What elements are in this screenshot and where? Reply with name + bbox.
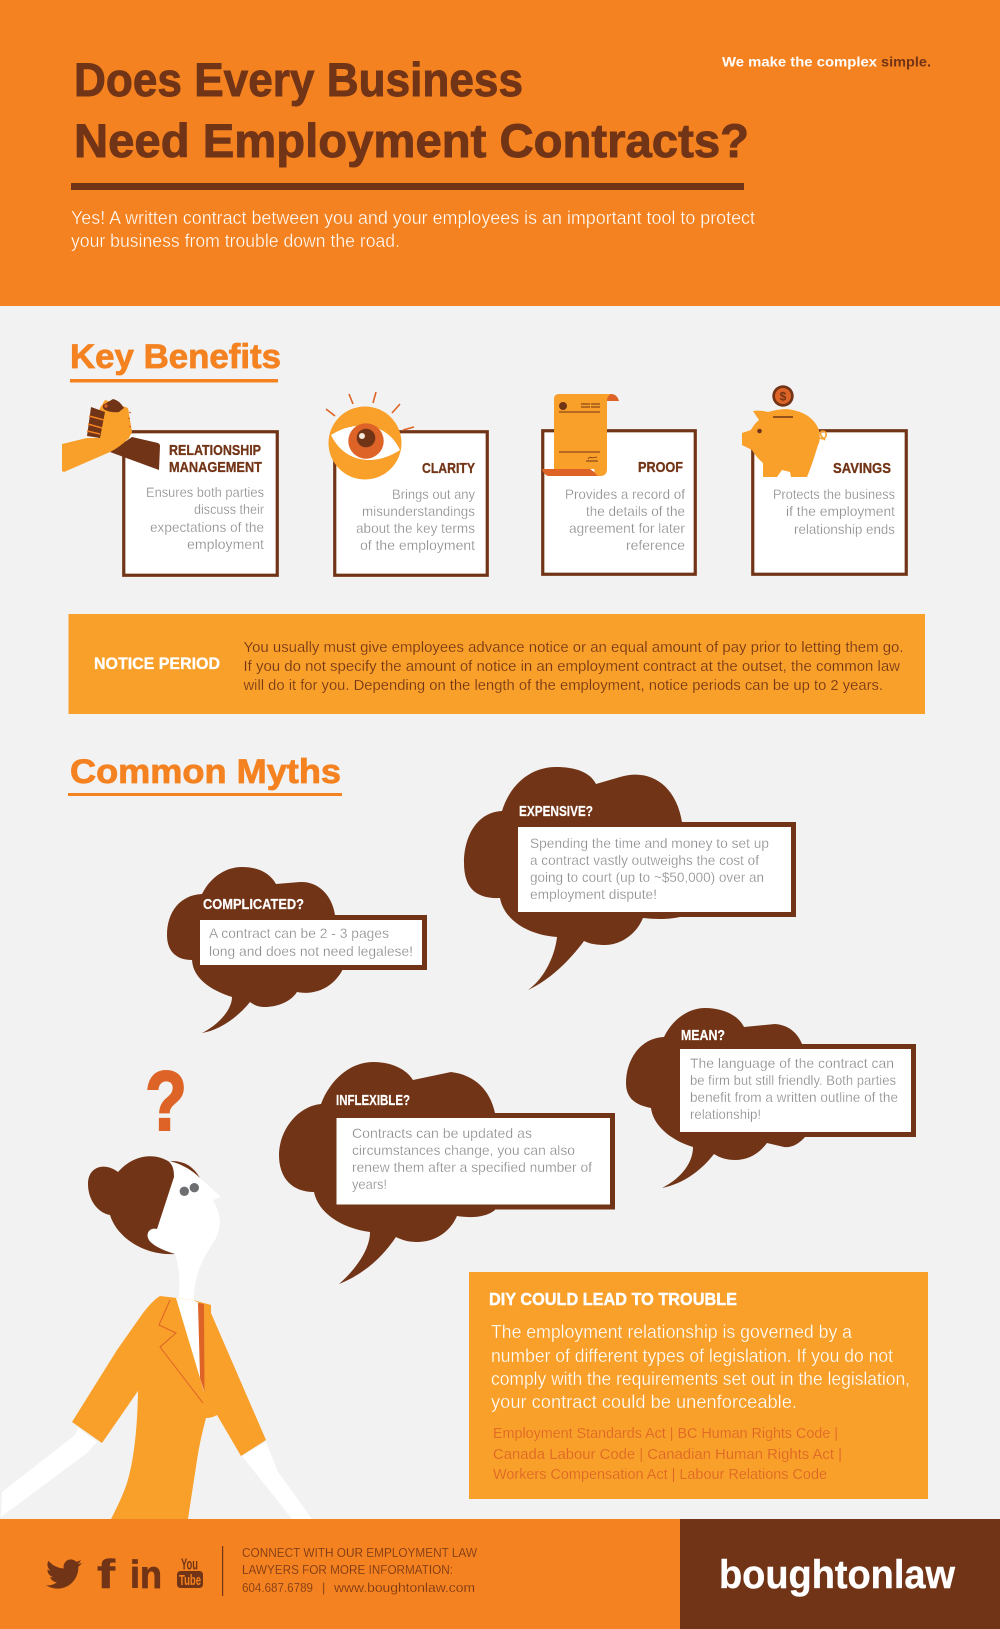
myth text xyxy=(690,1055,898,1122)
myth title: COMPLICATED? xyxy=(203,897,304,913)
card title xyxy=(169,443,262,476)
card text: of the employment xyxy=(360,537,475,553)
card text: employment xyxy=(187,536,264,552)
myth text: The language of the contract can xyxy=(690,1055,894,1071)
card text: Brings out any xyxy=(392,486,475,502)
logo panel xyxy=(680,1519,1000,1629)
heading: common myths: Common Myths xyxy=(70,753,341,791)
tie xyxy=(198,1303,204,1392)
notice heading: NOTICE PERIOD xyxy=(94,654,220,673)
intro text: Yes! A written contract between you and your employees is an important tool to protect xyxy=(71,207,755,228)
contact text: www.boughtonlaw.com xyxy=(333,1580,475,1595)
myth title: MEAN? xyxy=(681,1028,725,1044)
illustration: woman looking up xyxy=(1,1156,312,1519)
myth text: long and does not need legalese! xyxy=(209,943,413,959)
card text: agreement for later xyxy=(569,520,685,536)
myth title: INFLEXIBLE? xyxy=(336,1093,410,1109)
myth text: Spending the time and money to set up xyxy=(530,835,769,851)
card text: expectations of the xyxy=(150,519,264,535)
icon: youtube: Tube xyxy=(179,1572,201,1589)
myth text: Contracts can be updated as xyxy=(352,1125,532,1141)
card text: Provides a record of xyxy=(565,486,685,502)
tagline xyxy=(722,54,931,70)
DIY text: comply with the requirements set out in the legislation, xyxy=(491,1368,910,1389)
contact text: LAWYERS FOR MORE INFORMATION: xyxy=(242,1562,453,1577)
icon: piggy bank: $ xyxy=(780,390,787,404)
DIY text xyxy=(491,1321,910,1412)
card text: reference xyxy=(626,537,685,553)
title: Does Every Business xyxy=(74,53,523,106)
tagline: simple. xyxy=(881,54,931,70)
speech bubble: complicated xyxy=(167,867,424,1033)
speech bubble: inflexible xyxy=(279,1062,612,1284)
myth text xyxy=(352,1125,592,1192)
card title: PROOF xyxy=(638,460,683,476)
notice text: will do it for you. Depending on the length of the employment, notice periods can be up to 2 years. xyxy=(243,677,883,694)
icon: piggy bank xyxy=(742,385,826,477)
myth text: relationship! xyxy=(690,1106,761,1122)
icon: handshake xyxy=(62,399,160,472)
DIY text: your contract could be unenforceable. xyxy=(491,1391,797,1412)
title rule xyxy=(71,183,744,190)
card text: discuss their xyxy=(194,501,264,517)
card text: Ensures both parties xyxy=(146,484,264,500)
intro text xyxy=(71,207,755,251)
lapel xyxy=(159,1300,203,1403)
card title: SAVINGS xyxy=(833,461,891,477)
contact text: 604.687.6789 xyxy=(242,1580,313,1595)
myth text: employment dispute! xyxy=(530,886,657,902)
eyes xyxy=(180,1183,199,1196)
title xyxy=(74,53,749,167)
card text: the details of the xyxy=(586,503,685,519)
card text xyxy=(773,486,895,537)
myth text xyxy=(209,925,413,959)
title: Need Employment Contracts? xyxy=(74,114,749,167)
notice text: You usually must give employees advance notice or an equal amount of pay prior to letting them go. xyxy=(244,639,904,656)
jacket xyxy=(72,1296,266,1519)
legislation list: Canada Labour Code | Canadian Human Rights Act | xyxy=(493,1447,842,1463)
DIY text: number of different types of legislation. If you do not xyxy=(491,1345,893,1366)
myth text: be firm but still friendly. Both parties xyxy=(690,1072,896,1088)
speech bubble: expensive xyxy=(464,767,794,990)
icon: twitter bird xyxy=(46,1559,82,1589)
panel: notice period xyxy=(68,614,925,714)
notice text xyxy=(243,639,904,694)
hair xyxy=(88,1156,175,1254)
icon: youtube xyxy=(177,1556,203,1589)
contact text: | xyxy=(322,1580,325,1595)
myth text: years! xyxy=(352,1176,387,1192)
icon: facebook: f xyxy=(97,1551,115,1597)
icon: eye xyxy=(326,392,414,480)
myth text: A contract can be 2 - 3 pages xyxy=(209,925,389,941)
panel: clarity xyxy=(326,392,487,575)
card title: CLARITY xyxy=(422,461,475,477)
myth text: renew them after a specified number of xyxy=(352,1159,592,1175)
neck and face xyxy=(148,1162,221,1304)
card text: relationship ends xyxy=(794,521,895,537)
legislation list xyxy=(493,1426,842,1483)
panel: proof xyxy=(542,394,695,574)
card text: misunderstandings xyxy=(362,503,475,519)
header band xyxy=(0,0,1000,306)
panel: relationship management xyxy=(62,399,277,575)
myth text: a contract vastly outweighs the cost of xyxy=(530,852,759,868)
footer divider xyxy=(222,1546,223,1596)
contact text: CONNECT WITH OUR EMPLOYMENT LAW xyxy=(242,1545,478,1560)
card text xyxy=(146,484,264,552)
heading: key benefits: Key Benefits xyxy=(70,338,281,376)
notice text: If you do not specify the amount of notice in an employment contract at the outset, the common law xyxy=(244,658,900,675)
card title: MANAGEMENT xyxy=(169,460,262,476)
icon: youtube: You xyxy=(181,1556,198,1574)
right arm xyxy=(242,1442,312,1519)
icon: question mark: ? xyxy=(145,1054,187,1148)
left arm xyxy=(1,1428,97,1517)
myth text: going to court (up to ~$50,000) over an xyxy=(530,869,764,885)
legislation list: Employment Standards Act | BC Human Rights Code | xyxy=(493,1426,838,1442)
panel: savings xyxy=(742,385,906,574)
logo panel: boughtonlaw xyxy=(719,1553,956,1597)
myth title: EXPENSIVE? xyxy=(519,804,593,820)
card text xyxy=(565,486,685,553)
shirt xyxy=(176,1298,204,1392)
intro text: your business from trouble down the road. xyxy=(71,230,400,251)
DIY text: The employment relationship is governed by a xyxy=(491,1321,853,1342)
card text: if the employment xyxy=(786,503,895,519)
myth text xyxy=(530,835,769,902)
card text: Protects the business xyxy=(773,486,895,502)
icon: linkedin: in xyxy=(130,1554,162,1597)
panel: DIY could lead to trouble xyxy=(469,1272,928,1499)
contact text xyxy=(242,1545,478,1595)
legislation list: Workers Compensation Act | Labour Relations Code xyxy=(493,1467,827,1483)
footer xyxy=(0,1519,1000,1629)
speech bubble: mean xyxy=(626,1008,914,1188)
card text: about the key terms xyxy=(356,520,475,536)
card title: RELATIONSHIP xyxy=(169,443,261,459)
tagline: We make the complex xyxy=(722,54,878,70)
DIY heading: DIY COULD LEAD TO TROUBLE xyxy=(489,1289,737,1309)
myth text: circumstances change, you can also xyxy=(352,1142,575,1158)
card text xyxy=(356,486,475,553)
icon: scroll document xyxy=(542,394,619,476)
myth text: benefit from a written outline of the xyxy=(690,1089,898,1105)
